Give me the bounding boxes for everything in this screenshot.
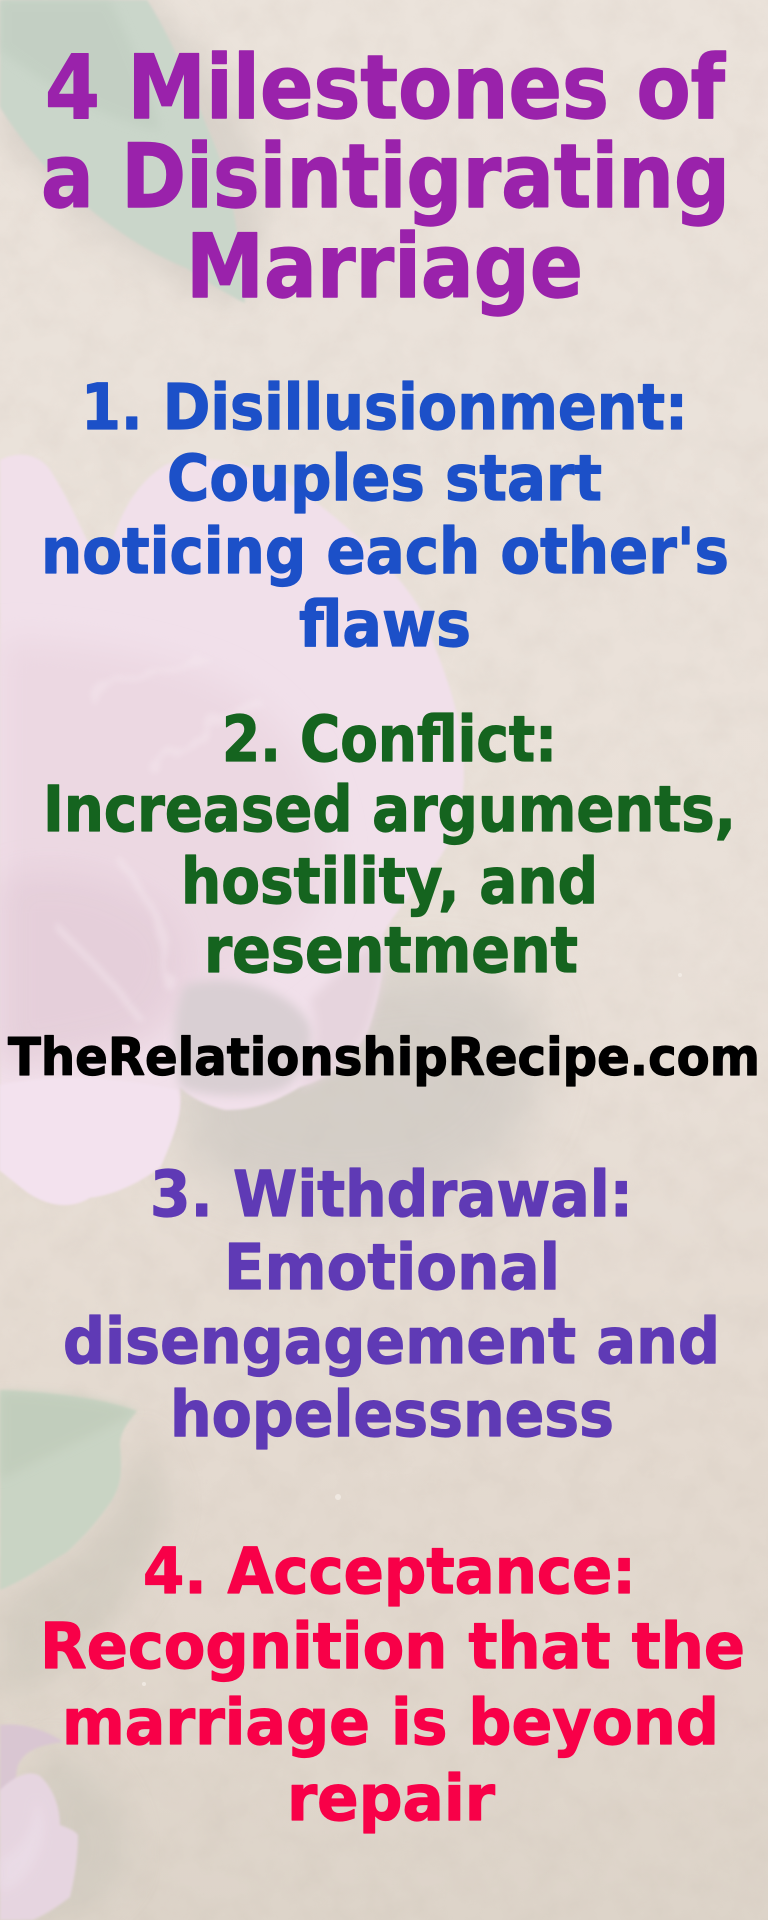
milestone 4: acceptance (40, 1535, 745, 1835)
milestone 1: disillusionment: noticing each other's (41, 515, 729, 588)
decoration: bottom left flower (0, 1724, 130, 1920)
milestone 4: acceptance: marriage is beyond (62, 1686, 719, 1759)
milestone 3: withdrawal: hopelessness (170, 1378, 614, 1451)
milestone 2: conflict (43, 703, 736, 987)
title: Marriage (186, 215, 583, 318)
milestone 1: disillusionment: 1. Disillusionment: (81, 371, 688, 444)
milestone 1: disillusionment (41, 371, 729, 661)
milestone 4: acceptance: Recognition that the (40, 1610, 745, 1683)
decoration: lower left leaf (0, 1390, 170, 1700)
peony inner ruffles (0, 640, 330, 1063)
milestone 4: acceptance: repair (287, 1762, 495, 1835)
milestone 4: acceptance: 4. Acceptance: (143, 1535, 636, 1608)
milestone 3: withdrawal: Emotional (224, 1231, 560, 1304)
milestone 3: withdrawal (63, 1158, 720, 1451)
decoration: top left leaf (0, 0, 265, 305)
peony ruffle highlights (60, 660, 260, 1020)
peony shadow (180, 966, 543, 1208)
peony outer petals (0, 455, 464, 1204)
milestone 1: disillusionment: Couples start (167, 442, 602, 515)
milestone 3: withdrawal: 3. Withdrawal: (150, 1158, 633, 1231)
title (41, 36, 730, 318)
milestone 2: conflict: hostility, and (181, 845, 598, 918)
milestone 2: conflict: 2. Conflict: (222, 703, 557, 776)
milestone 2: conflict: resentment (204, 914, 578, 987)
milestone 3: withdrawal: disengagement and (63, 1305, 720, 1378)
milestone 1: disillusionment: flaws (299, 588, 471, 661)
decoration: large pink peony (0, 455, 543, 1208)
